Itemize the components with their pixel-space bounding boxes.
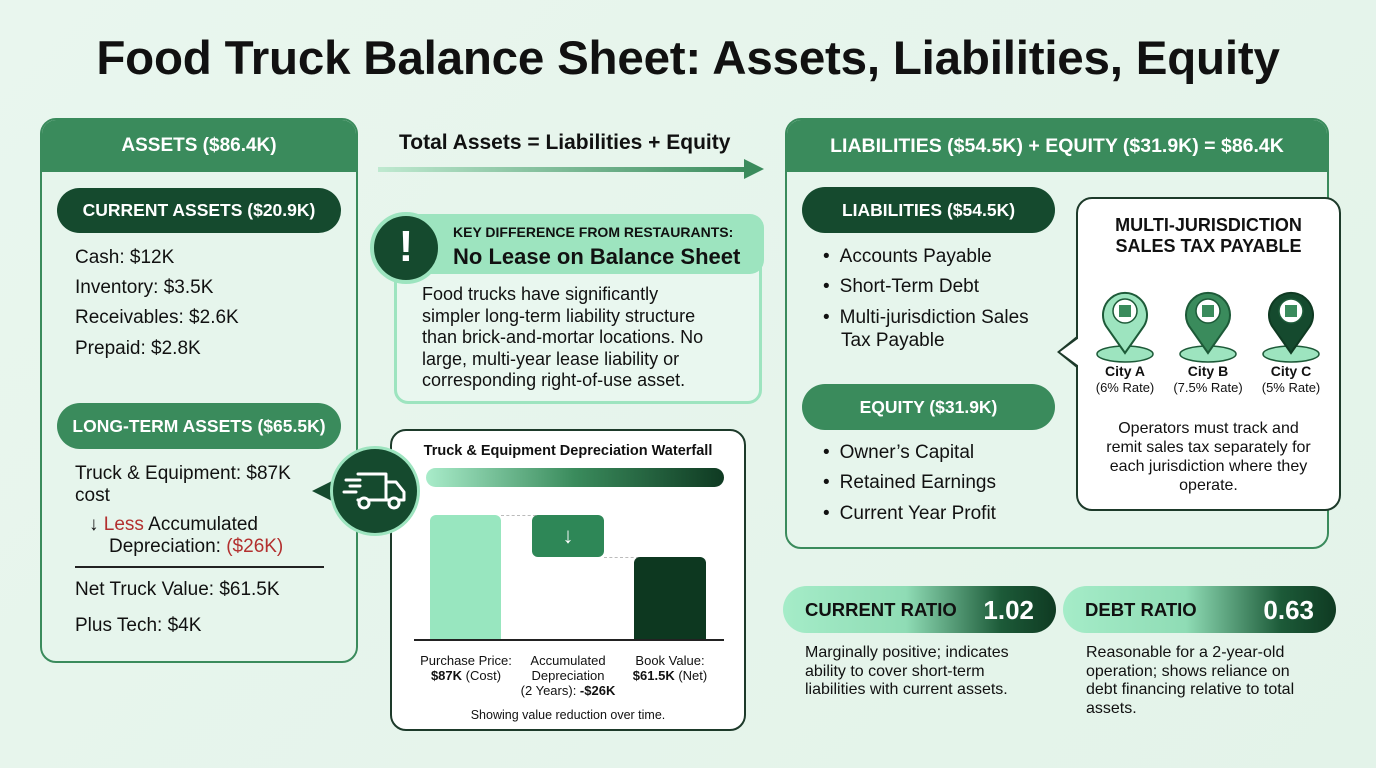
long-term assets list: Depreciation: ($26K) xyxy=(109,536,283,557)
panel: sales tax xyxy=(1057,197,1341,511)
ratio: current: 1.02 xyxy=(983,595,1034,625)
chart: depreciation waterfall: $61.5K (Net) xyxy=(633,668,707,683)
chart: depreciation waterfall xyxy=(390,429,746,731)
chart: depreciation waterfall: Accumulated xyxy=(530,653,606,668)
callout header: KEY DIFFERENCE FROM RESTAURANTS: xyxy=(453,224,733,240)
icon: truck xyxy=(312,446,420,536)
sales tax title: SALES TAX PAYABLE xyxy=(1115,236,1302,256)
ratio: debt: 0.63 xyxy=(1263,595,1314,625)
equity list: Current Year Profit xyxy=(840,503,996,524)
sales tax title xyxy=(1115,215,1302,256)
icon: exclamation: ! xyxy=(399,222,413,271)
long-term assets list xyxy=(75,463,324,636)
sales tax title: MULTI-JURISDICTION xyxy=(1115,215,1302,235)
assets header: ASSETS ($86.4K) xyxy=(121,135,277,156)
liabilities equity header xyxy=(787,120,1327,172)
equity list: Retained Earnings xyxy=(840,472,996,493)
equity list xyxy=(824,442,996,524)
current assets pill xyxy=(57,188,341,233)
long-term assets list: ↓ Less Accumulated xyxy=(89,514,258,535)
callout body: large, multi-year lease liability or xyxy=(422,348,679,368)
liabilities list xyxy=(824,246,1029,351)
arrow: equation xyxy=(378,131,764,179)
icons: city pins xyxy=(1096,292,1320,363)
current assets list: Cash: $12K xyxy=(75,247,174,268)
chart: depreciation waterfall: (2 Years): -$26K xyxy=(521,683,615,698)
callout body: than brick-and-mortar locations. No xyxy=(422,327,703,347)
equity list: Owner’s Capital xyxy=(840,442,974,463)
ratio: debt: DEBT RATIO xyxy=(1085,599,1197,620)
city labels: City A xyxy=(1105,363,1145,379)
chart: depreciation waterfall: Depreciation xyxy=(532,668,604,683)
bar: book value xyxy=(634,557,706,639)
city labels: (5% Rate) xyxy=(1262,380,1320,395)
chart: depreciation waterfall: Truck & Equipment Depreciation Waterfall xyxy=(424,443,712,459)
callout header xyxy=(400,214,764,274)
liabilities list: Short-Term Debt xyxy=(840,276,979,297)
chart: depreciation waterfall: Showing value reduction over time. xyxy=(471,708,665,722)
city labels: City C xyxy=(1271,363,1311,379)
assets header xyxy=(42,120,356,172)
bar: depreciation: ↓ xyxy=(562,523,574,548)
city labels: (7.5% Rate) xyxy=(1173,380,1243,395)
long-term assets list: Plus Tech: $4K xyxy=(75,615,201,636)
liabilities list: Tax Payable xyxy=(841,330,945,351)
current assets list xyxy=(75,247,239,359)
equity pill: EQUITY ($31.9K) xyxy=(860,396,997,416)
city labels: City B xyxy=(1188,363,1228,379)
liabilities pill: LIABILITIES ($54.5K) xyxy=(842,200,1015,220)
liabilities list: Multi-jurisdiction Sales xyxy=(840,307,1029,328)
liabilities equity header: LIABILITIES ($54.5K) + EQUITY ($31.9K) = $86.4K xyxy=(830,134,1284,156)
title: Food Truck Balance Sheet: Assets, Liabilities, Equity xyxy=(96,32,1280,85)
current assets list: Inventory: $3.5K xyxy=(75,277,213,298)
callout body xyxy=(422,284,703,390)
long-term assets list: Net Truck Value: $61.5K xyxy=(75,579,280,600)
callout header: No Lease on Balance Sheet xyxy=(453,244,740,269)
long-term assets pill: LONG-TERM ASSETS ($65.5K) xyxy=(72,416,326,436)
ratio: current xyxy=(783,586,1056,633)
callout body: corresponding right-of-use asset. xyxy=(422,370,685,390)
ratio text: current: Marginally positive; indicates ability to cover short-term liabilities with current assets. xyxy=(805,644,1009,698)
chart labels xyxy=(420,653,512,683)
callout: key difference xyxy=(370,212,764,404)
ratio text: debt: Reasonable for a 2-year-old operation; shows reliance on debt financing relative to total assets. xyxy=(1086,644,1294,716)
chart labels: $87K (Cost) xyxy=(431,668,501,683)
icon: exclamation xyxy=(370,212,442,284)
callout body: simpler long-term liability structure xyxy=(422,306,695,326)
long-term assets list: cost xyxy=(75,485,110,506)
callout body: Food trucks have significantly xyxy=(422,284,658,304)
bar: purchase price xyxy=(430,515,501,639)
city labels: (6% Rate) xyxy=(1096,380,1154,395)
liabilities pill xyxy=(802,187,1055,233)
ratio: current: CURRENT RATIO xyxy=(805,599,957,620)
ratio: debt xyxy=(1063,586,1336,633)
equity pill xyxy=(802,384,1055,430)
bar: depreciation xyxy=(532,515,604,557)
current assets list: Prepaid: $2.8K xyxy=(75,338,201,359)
arrow: equation: Total Assets = Liabilities + Equity xyxy=(399,131,730,154)
long-term assets pill xyxy=(57,403,341,449)
panel: assets xyxy=(40,118,358,663)
chart: depreciation waterfall: Book Value: xyxy=(635,653,705,668)
liabilities list: Accounts Payable xyxy=(840,246,992,267)
city labels xyxy=(1096,363,1320,395)
chart labels: Purchase Price: xyxy=(420,653,512,668)
sales tax note: Operators must track and remit sales tax separately for each jurisdiction where they operate. xyxy=(1106,420,1311,494)
long-term assets list: Truck & Equipment: $87K xyxy=(75,463,291,484)
current assets list: Receivables: $2.6K xyxy=(75,307,239,328)
panel: liabilities + equity xyxy=(785,118,1329,549)
current assets pill: CURRENT ASSETS ($20.9K) xyxy=(83,200,315,220)
